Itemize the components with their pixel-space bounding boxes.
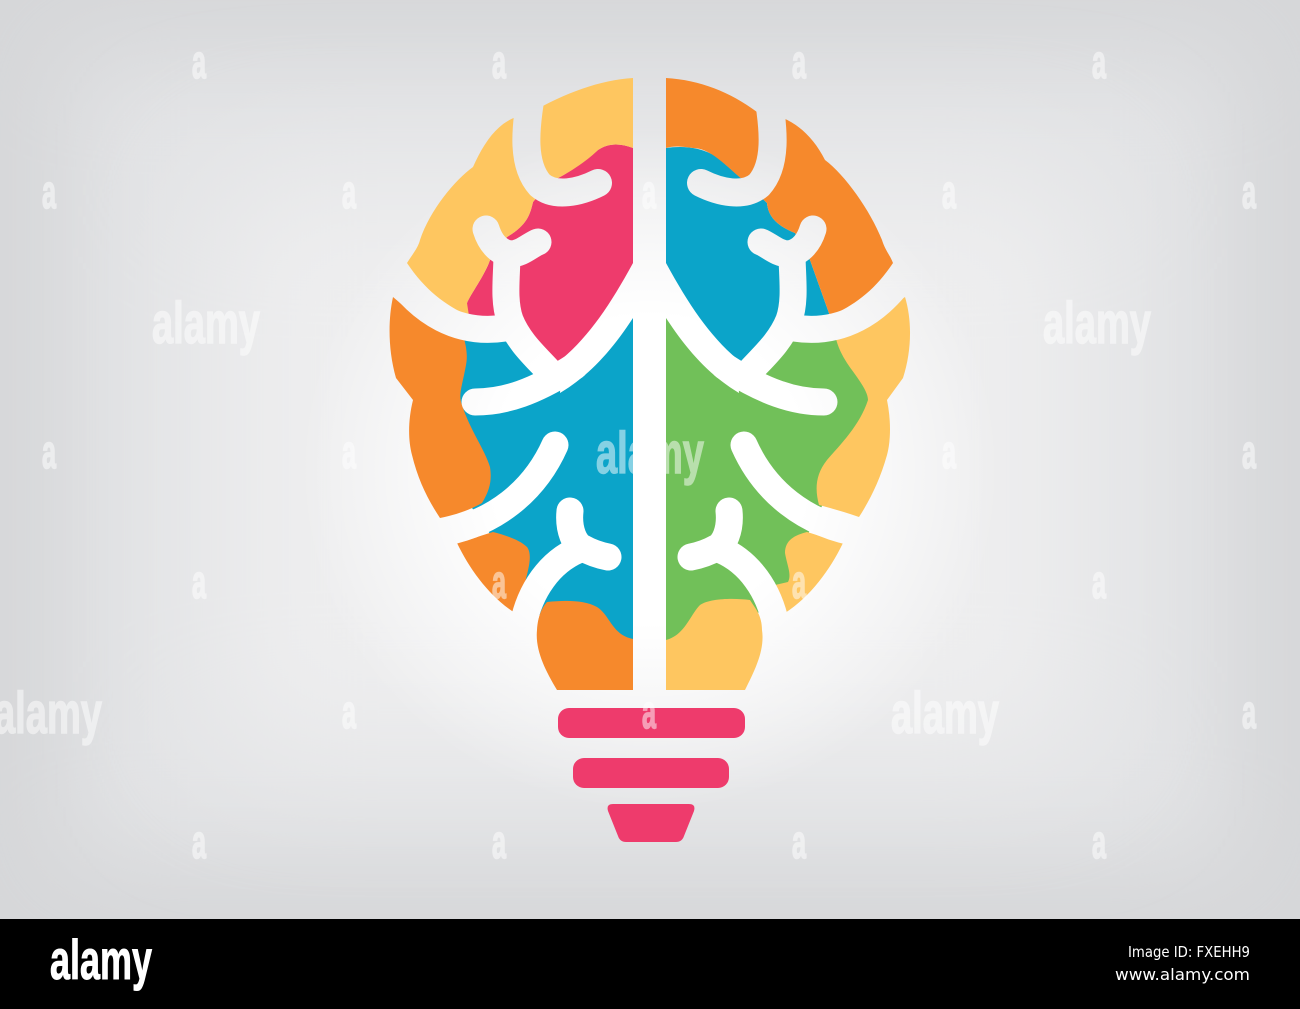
website: www.alamy.com — [1115, 965, 1250, 984]
watermark: a — [1242, 425, 1256, 478]
watermark: a — [942, 425, 956, 478]
watermark: a — [342, 425, 356, 478]
base tip — [608, 804, 694, 842]
watermark: a — [192, 35, 206, 88]
watermark: a — [1092, 555, 1106, 608]
watermark: alamy — [596, 421, 704, 486]
left pink region — [466, 144, 633, 375]
watermark: a — [492, 815, 506, 868]
right blue region — [666, 147, 830, 375]
watermark: a — [492, 555, 506, 608]
right orange lobes — [666, 78, 893, 316]
left yellow lobes — [407, 78, 633, 316]
watermark: alamy — [1043, 291, 1151, 356]
brain lightbulb illustration — [390, 78, 910, 842]
watermark: a — [1242, 165, 1256, 218]
footer bar — [0, 919, 1300, 1009]
watermark: a — [792, 35, 806, 88]
left orange bulb neck — [537, 601, 633, 690]
watermark: a — [492, 35, 506, 88]
watermark: a — [1092, 35, 1106, 88]
watermark: a — [792, 815, 806, 868]
watermark: a — [342, 685, 356, 738]
bulb screw base — [558, 708, 745, 842]
left orange lower lobe — [457, 532, 530, 613]
right yellow bulb neck — [666, 599, 763, 690]
watermark: a — [42, 165, 56, 218]
watermark: a — [1242, 685, 1256, 738]
watermark: a — [942, 165, 956, 218]
base bar top — [558, 708, 745, 738]
right green region — [666, 310, 875, 650]
watermark: a — [642, 685, 656, 738]
watermark: a — [342, 165, 356, 218]
watermark: a — [642, 165, 656, 218]
right yellow lower lobe — [775, 532, 843, 613]
watermark — [0, 35, 1256, 868]
watermark: a — [42, 425, 56, 478]
watermark: alamy — [891, 681, 999, 746]
watermark: alamy — [152, 291, 260, 356]
base bar middle — [573, 758, 729, 788]
watermark: a — [792, 555, 806, 608]
left orange middle lobe — [390, 297, 491, 518]
image id: Image ID: FXEHH9 — [1128, 943, 1250, 961]
watermark: a — [192, 815, 206, 868]
right hemisphere — [666, 78, 910, 690]
watermark: a — [1092, 815, 1106, 868]
watermark: a — [192, 555, 206, 608]
left blue region — [455, 310, 633, 650]
right yellow middle lobe — [817, 297, 910, 517]
footer logo: alamy — [50, 928, 152, 991]
left hemisphere — [390, 78, 633, 690]
